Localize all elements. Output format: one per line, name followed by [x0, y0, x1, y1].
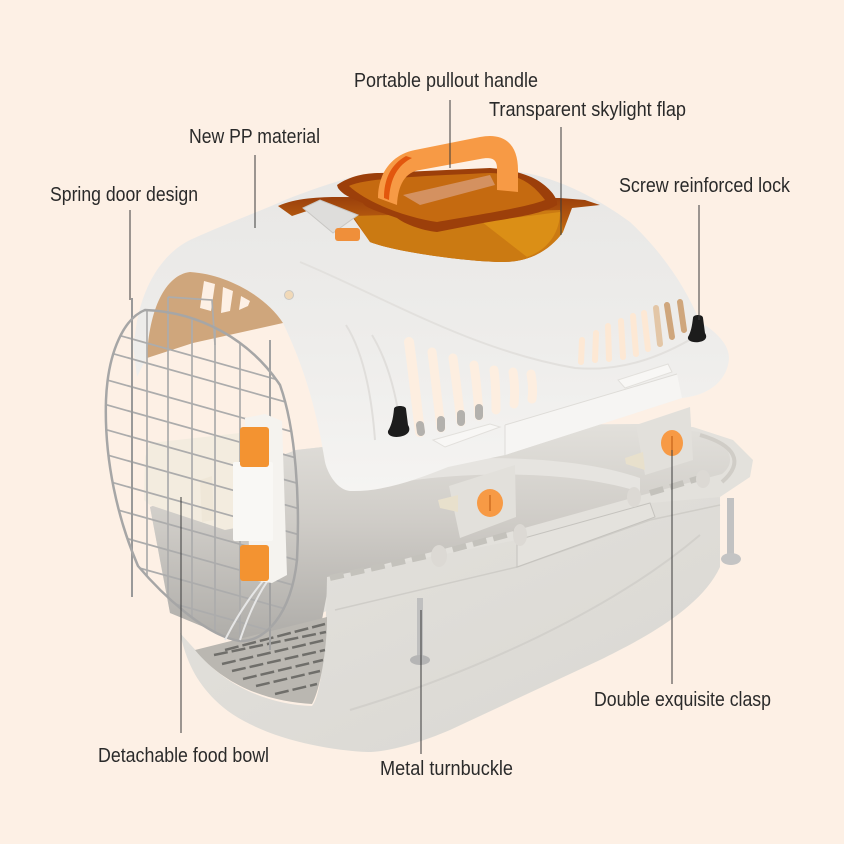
icon: right metal turnbuckle: [721, 498, 741, 565]
label: Screw reinforced lock: Screw reinforced lock: [619, 175, 791, 197]
label: Spring door design: Spring door design: [50, 184, 198, 206]
arch interior seen through opening: [147, 272, 283, 358]
icon: left screw lock: [388, 406, 409, 437]
rivet: [284, 290, 294, 300]
detachable food bowl: [144, 433, 240, 530]
infographic canvas: [50, 72, 790, 775]
right vent slots: [581, 302, 684, 362]
leader lines: [130, 100, 699, 754]
latch on lid: [303, 200, 358, 233]
tray: rim base and interior: [150, 424, 753, 642]
clasp: right: [625, 407, 693, 475]
tray rim details: [330, 435, 734, 578]
label: Double exquisite clasp: Double exquisite clasp: [594, 689, 771, 711]
door latch: [233, 414, 287, 583]
portable handle: [378, 136, 518, 205]
transparent skylight lid: [278, 168, 600, 262]
label: Transparent skylight flap: Transparent skylight flap: [489, 99, 686, 121]
carrier top shell: [133, 172, 729, 491]
label: New PP material: New PP material: [189, 126, 320, 148]
tray: front wall: [180, 497, 720, 752]
label: Portable pullout handle: Portable pullout handle: [354, 70, 538, 92]
label: Metal turnbuckle: Metal turnbuckle: [380, 758, 513, 780]
clasp: left: [438, 465, 516, 538]
icon: right screw lock: [688, 315, 706, 342]
icon: front metal turnbuckle: [410, 598, 430, 665]
label: Detachable food bowl: Detachable food bowl: [98, 745, 269, 767]
floor grid: [195, 617, 327, 704]
left vent slots: [409, 342, 533, 432]
wire door: [100, 290, 300, 650]
shell molded details: [346, 325, 402, 440]
